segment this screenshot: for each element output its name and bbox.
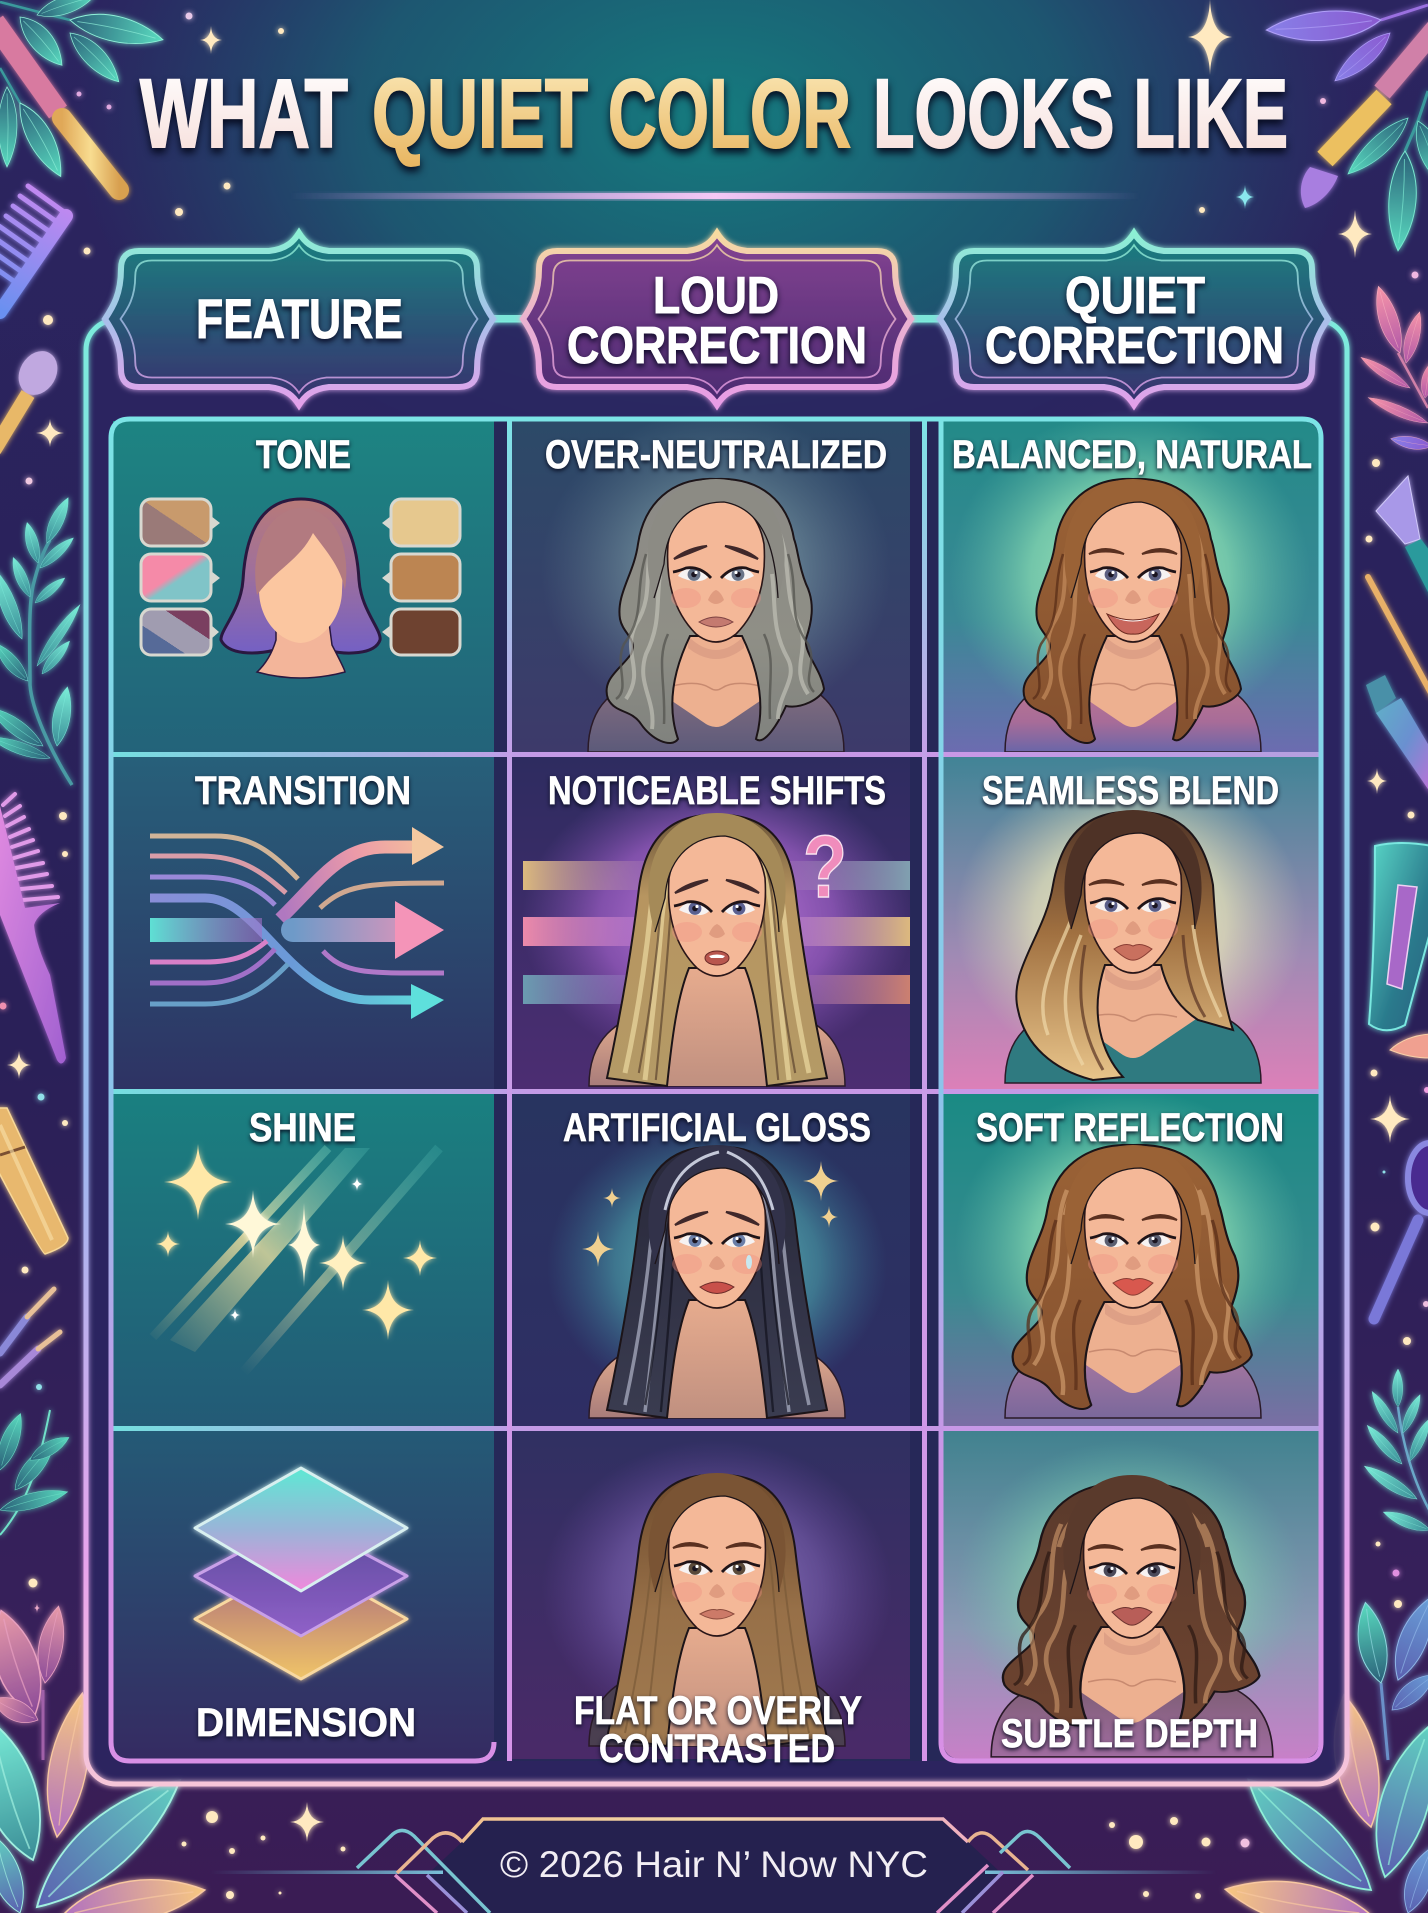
heading: balanced natural: BALANCED, NATURAL xyxy=(952,433,1312,477)
icon: right teal leaves xyxy=(1361,1369,1428,1536)
column header: quiet correction xyxy=(940,233,1328,405)
icon: bottle xyxy=(1369,843,1428,1030)
icon: small right leaf xyxy=(1390,1034,1428,1058)
icon: tail comb xyxy=(0,794,66,1064)
icon: left mid leaves xyxy=(0,495,84,785)
icon: top-left makeup brush xyxy=(0,22,119,190)
portrait: subtle depth hair xyxy=(991,1475,1273,1757)
portrait: flat hair xyxy=(589,1473,845,1746)
panel: flat or overly contrasted xyxy=(512,1431,910,1771)
heading: seamless blend: SEAMLESS BLEND xyxy=(982,769,1279,813)
heading: dimension: DIMENSION xyxy=(196,1701,416,1745)
panel: noticeable shifts xyxy=(512,757,912,1089)
title divider xyxy=(290,193,1140,199)
decorative tools and leaves: right side xyxy=(1221,5,1428,1913)
icon: small tool brushes xyxy=(0,1289,60,1385)
comparison grid xyxy=(110,410,1322,1771)
portrait: artificial gloss hair xyxy=(589,1145,845,1418)
heading: flat or overly contrasted xyxy=(574,1689,862,1771)
icon: top-right teal leaves xyxy=(1342,91,1428,252)
icon: shine sparkles xyxy=(153,1144,439,1373)
icon: gold tube xyxy=(0,1108,68,1254)
table outer frame xyxy=(86,315,1347,1784)
heading: shine: SHINE xyxy=(249,1106,356,1150)
portrait: seamless blend hair xyxy=(1005,810,1261,1083)
icon: top-left leaves xyxy=(0,0,166,182)
grid lines xyxy=(110,418,1322,1761)
heading: flat or overly contrasted: FLAT OR OVERLY xyxy=(574,1689,862,1733)
title: COLOR xyxy=(608,59,851,168)
icon: bottom-right leaves xyxy=(1221,1591,1428,1913)
heading: flat or overly contrasted: CONTRASTED xyxy=(599,1727,835,1771)
heading: soft reflection: SOFT REFLECTION xyxy=(976,1106,1284,1150)
icon: dimension layers xyxy=(195,1468,407,1679)
grid strip backdrop xyxy=(110,418,1322,1761)
panel: shine feature xyxy=(113,1094,494,1426)
heading: noticeable shifts: NOTICEABLE SHIFTS xyxy=(548,769,886,813)
icon: tone swatches and head xyxy=(141,499,460,678)
icon: tube xyxy=(1366,675,1428,795)
icon: purple hair clip xyxy=(1374,1143,1428,1319)
portrait: balanced natural hair xyxy=(1005,479,1261,752)
column header: quiet correction: CORRECTION xyxy=(985,317,1284,375)
panel: over-neutralized xyxy=(512,410,910,752)
title xyxy=(140,59,1288,168)
column header: loud correction: LOUD xyxy=(653,267,779,325)
column header: feature: FEATURE xyxy=(196,287,403,350)
portrait: gray over-neutralized hair xyxy=(588,479,844,752)
icon: top-right purple leaves xyxy=(1265,5,1428,88)
footer ornament lines xyxy=(210,1819,1217,1913)
panel: tone feature xyxy=(113,421,494,752)
icon: left comb xyxy=(0,186,66,312)
panel: artificial gloss xyxy=(512,1094,910,1426)
column header: loud correction xyxy=(523,233,911,405)
column header: feature xyxy=(105,233,493,405)
icon: fan brush xyxy=(1376,476,1428,600)
copyright text: © 2026 Hair N’ Now NYC xyxy=(500,1844,928,1885)
icon: top-right makeup brush xyxy=(1301,28,1428,208)
column header: quiet correction: QUIET xyxy=(1065,267,1205,325)
heading: subtle depth: SUBTLE DEPTH xyxy=(1001,1712,1258,1756)
portrait: soft reflection hair xyxy=(1005,1145,1261,1418)
heading: transition: TRANSITION xyxy=(195,769,411,813)
panel: transition feature xyxy=(113,757,494,1089)
icon: transition arrows xyxy=(150,827,444,1019)
heading: tone: TONE xyxy=(256,433,351,477)
icon: right pink leaves xyxy=(1358,284,1428,452)
panel: seamless blend xyxy=(943,757,1319,1089)
icon: lower-left leaves xyxy=(0,1410,72,1535)
heading: artificial gloss: ARTIFICIAL GLOSS xyxy=(563,1106,871,1150)
footer plate xyxy=(427,1819,1000,1913)
icon: pencil xyxy=(1368,577,1428,695)
panel: soft reflection xyxy=(943,1090,1319,1426)
panel: balanced natural xyxy=(943,410,1319,752)
icon: question mark: ? xyxy=(803,817,847,916)
column header: loud correction: CORRECTION xyxy=(567,317,867,375)
icon: gloss sparkles xyxy=(582,1161,839,1267)
heading: over-neutralized: OVER-NEUTRALIZED xyxy=(545,433,887,477)
portrait: noticeable shifts hair xyxy=(589,813,845,1086)
icon: small brush xyxy=(0,344,65,450)
footer xyxy=(210,1819,1217,1913)
panel: dimension feature xyxy=(113,1431,494,1759)
icon: bottom-left large leaves xyxy=(0,1604,208,1913)
chart: tone shift bands xyxy=(523,861,910,1004)
panel: subtle depth xyxy=(943,1431,1319,1759)
decorative tools and leaves: left side xyxy=(0,0,208,1913)
title: QUIET xyxy=(372,59,588,168)
title: WHAT xyxy=(140,59,348,168)
